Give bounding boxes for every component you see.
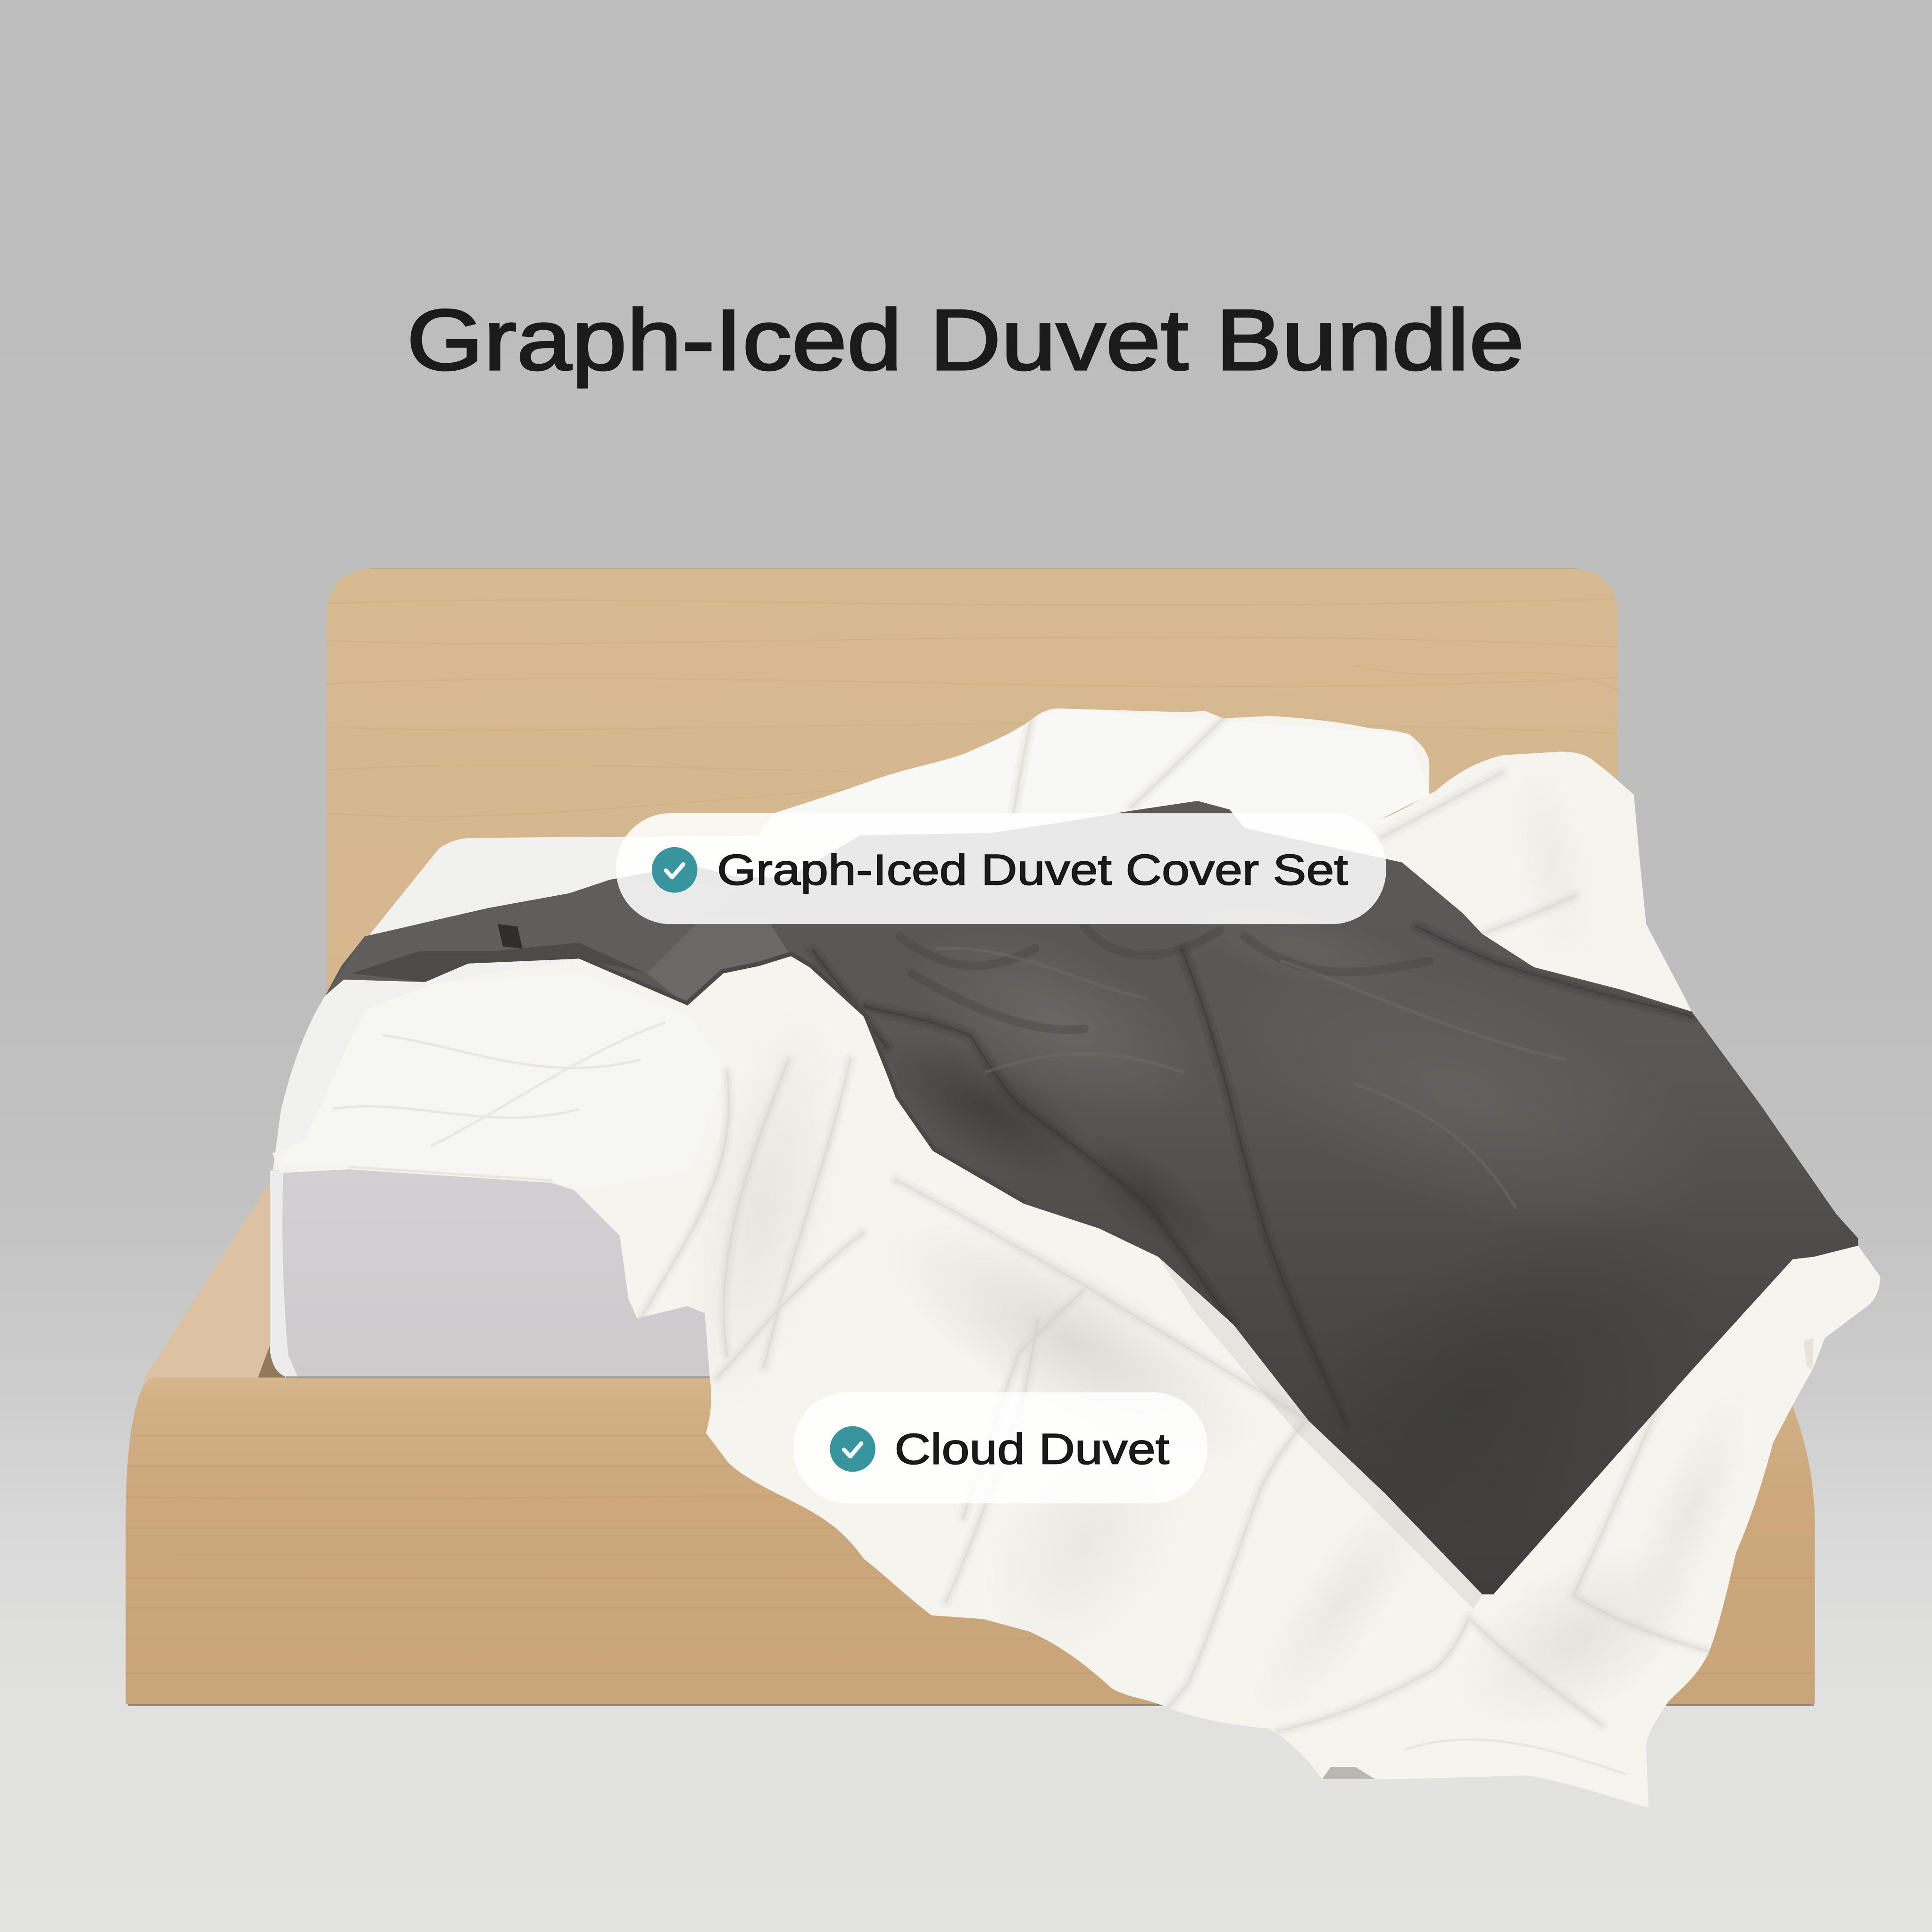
upper drape ridges [899, 926, 1429, 1030]
pocket fold [498, 924, 523, 949]
label: Cloud Duvet [793, 1392, 1208, 1503]
bed base gap [258, 1346, 286, 1379]
mattress top sheet [270, 835, 789, 1193]
bed base [123, 1377, 1817, 1707]
title: Graph-Iced Duvet Bundle [407, 291, 1524, 388]
floor contact line [128, 1704, 1814, 1706]
icon: check badge [830, 1426, 875, 1472]
icon: check badge [652, 847, 698, 893]
duvet tuft [1804, 1338, 1814, 1370]
duvet [272, 708, 1880, 1807]
shadow cast by cover [1158, 1257, 1482, 1609]
main highlights [1183, 898, 1749, 1295]
duvet body [272, 708, 1880, 1807]
upper bright lobes [790, 708, 1424, 819]
shadow under floor fold [1322, 1767, 1375, 1779]
duvet shading and quilting [281, 708, 1773, 1779]
pillow end [281, 974, 727, 1190]
label: Graph-Iced Duvet Cover Set [616, 813, 1386, 924]
left strip [325, 880, 739, 996]
hem band [688, 956, 1024, 1204]
bed base inner surface [143, 1183, 270, 1380]
label text: Cloud Duvet [894, 1425, 1169, 1473]
dark duvet cover [325, 801, 1858, 1659]
headboard [326, 568, 1618, 993]
cover folds [325, 880, 1778, 1659]
flat panel [647, 918, 791, 1006]
main dark areas [1179, 1126, 1778, 1659]
fold strokes [813, 926, 1692, 1425]
soft shading [854, 1174, 1291, 1512]
label text: Graph-Iced Duvet Cover Set [717, 846, 1348, 894]
pillow creases [333, 1023, 1626, 1774]
soft crease strokes [641, 718, 1713, 1731]
mattress side [270, 1158, 727, 1377]
mattress corner band [270, 1171, 298, 1377]
mattress [270, 835, 789, 1378]
bed frame [123, 566, 1817, 1707]
